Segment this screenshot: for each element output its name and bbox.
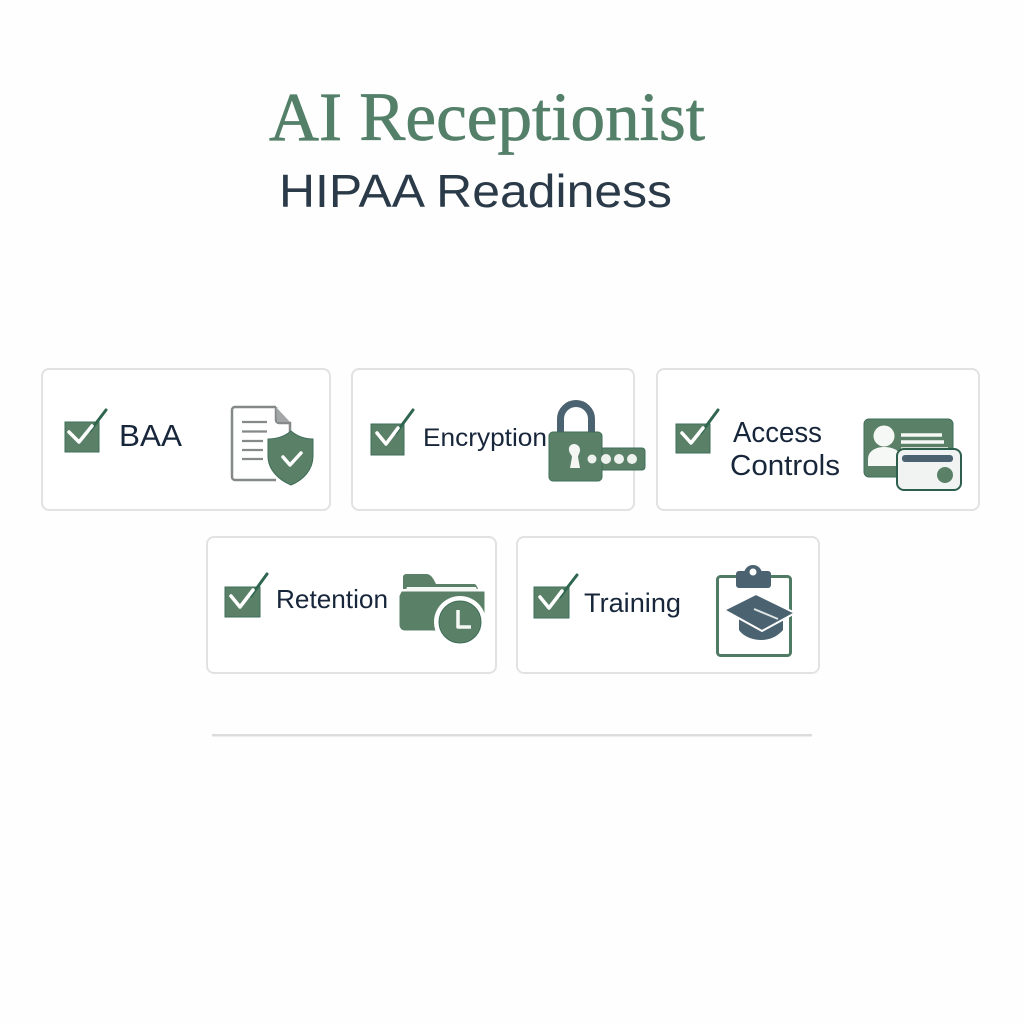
label: Access Controls: [730, 417, 840, 482]
label: Access Controls: Controls: [730, 450, 840, 482]
icon: clipboard with graduation cap: [718, 565, 795, 656]
label: Access Controls: Access: [733, 417, 822, 449]
panel: Training: [517, 537, 819, 673]
icon: padlock with code: [549, 404, 645, 481]
checkbox: Access Controls: [676, 410, 718, 453]
label: Training: Training: [584, 588, 681, 618]
icon: ID card and access card: [864, 419, 961, 490]
title: AI Receptionist: [269, 79, 705, 155]
label: Retention: Retention: [276, 584, 388, 614]
panel: Access Controls: [657, 369, 979, 510]
label: Encryption: Encryption: [423, 424, 547, 452]
panel: BAA: [42, 369, 330, 510]
icon: folder with clock: [400, 574, 486, 648]
label: BAA: BAA: [119, 418, 182, 453]
divider: [212, 734, 812, 736]
subtitle: HIPAA Readiness: [279, 165, 672, 217]
panel: Encryption: [352, 369, 645, 510]
checkbox: Training: [534, 575, 577, 618]
icon: document with shield: [232, 407, 313, 485]
checkbox: BAA: [65, 410, 106, 452]
panel: Retention: [207, 537, 496, 673]
checkbox: Encryption: [371, 410, 413, 455]
checkbox: Retention: [225, 574, 267, 617]
